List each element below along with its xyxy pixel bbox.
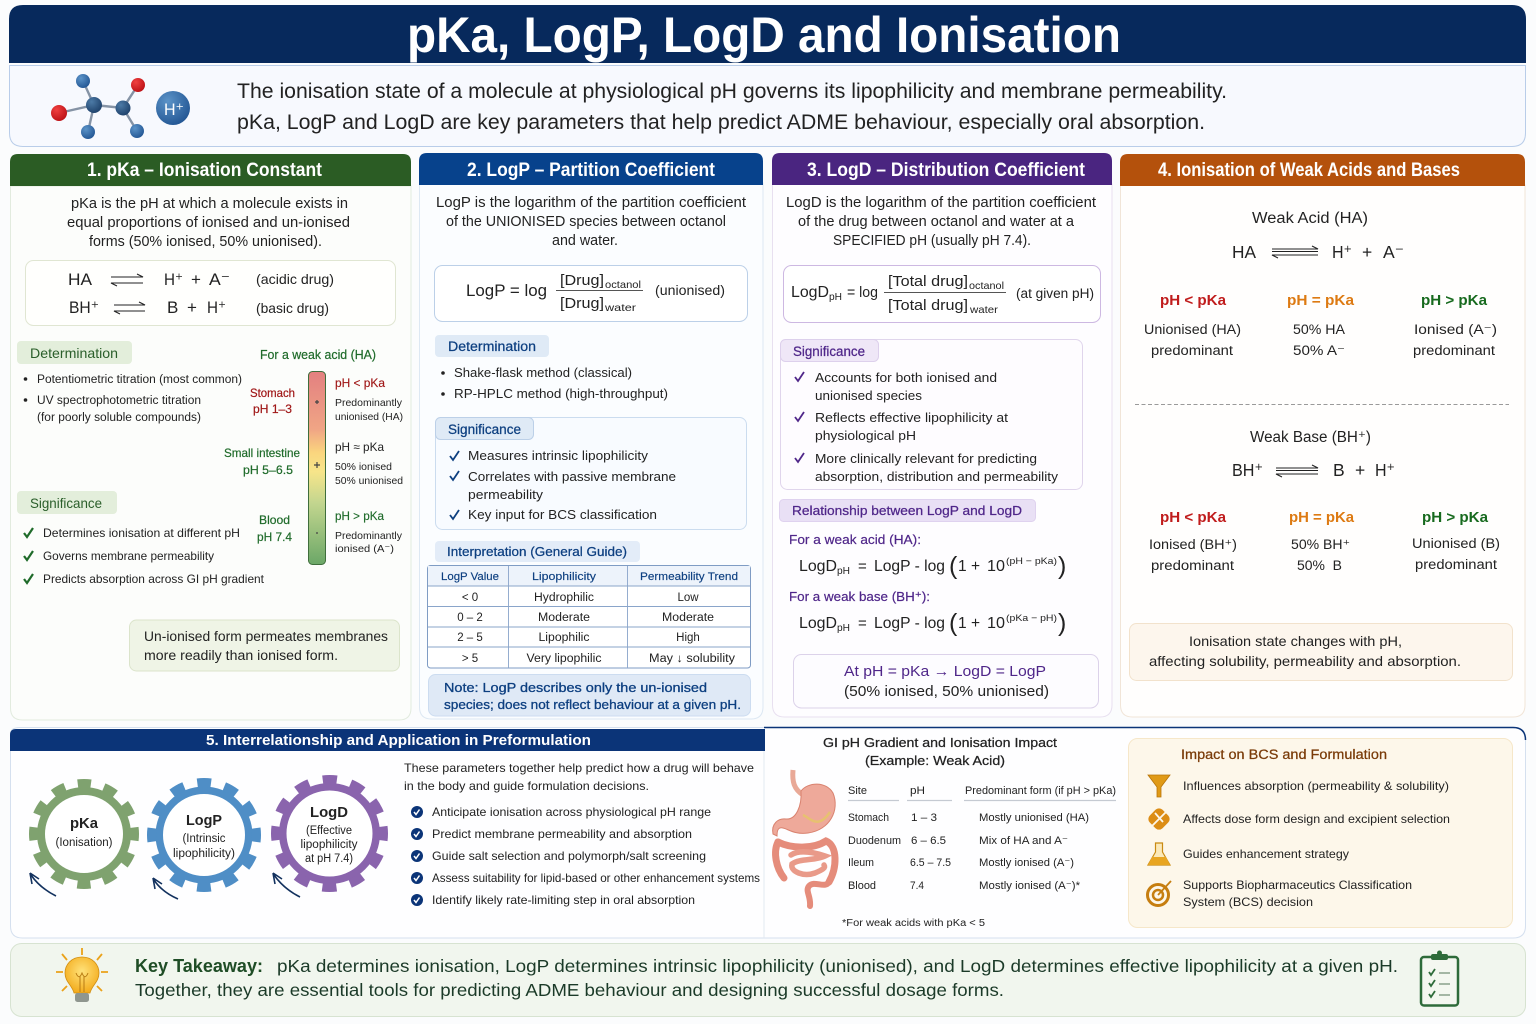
formula: weak base: 1 +: [958, 615, 980, 632]
table: LogP interpretation: Very lipophilic: [526, 653, 602, 665]
impact item: BCS: System (BCS) decision: [1183, 896, 1313, 909]
arrow: pKa gear: [30, 873, 56, 896]
chip: interpretation: [435, 541, 640, 562]
table: LogP interpretation: < 0: [462, 592, 478, 604]
chip: relationship: [780, 500, 1036, 522]
callout: un-ionised form: Un-ionised form permeates membranes: [144, 629, 388, 644]
weak acid block: Ionised (A⁻): [1414, 322, 1497, 337]
significance list: [24, 527, 265, 586]
callout: LogD equals LogP: [794, 654, 1098, 708]
intro text: pKa, LogP and LogD are key parameters that help predict ADME behaviour, especially oral absorption.: [237, 110, 1205, 134]
significance list: physiological pH: [815, 428, 916, 443]
weak base block: 50% BH⁺: [1291, 537, 1350, 552]
formula: weak acid: LogP - log: [874, 558, 945, 575]
pH scale heading: For a weak acid (HA): [260, 348, 376, 362]
determination list: UV spectrophotometric titration: [37, 395, 201, 407]
table: GI sites: 6 – 6.5: [911, 835, 946, 847]
equilibrium equations: +: [187, 298, 197, 317]
pH scale labels: 50% ionised: [335, 461, 392, 473]
arrow: LogD gear: [273, 873, 300, 897]
note: LogP: Note: LogP describes only the un-ionised: [444, 680, 707, 695]
table: LogP interpretation: Lipophilicity: [532, 571, 597, 583]
formula: weak base: LogP - log: [874, 615, 945, 632]
table: LogP interpretation: LogP Value: [441, 571, 499, 583]
callout: ionisation state: affecting solubility, permeability and absorption.: [1149, 654, 1461, 669]
weak base block: pH > pKa: [1422, 510, 1489, 526]
chip: interpretation: Interpretation (General Guide): [447, 544, 627, 559]
impact item: enhancement: Guides enhancement strategy: [1183, 848, 1349, 861]
table: LogP interpretation: 0 – 2: [457, 612, 483, 624]
impact item: BCS: [1183, 879, 1412, 909]
table: GI sites: Mostly unionised (HA): [979, 812, 1089, 824]
determination list: Shake-flask method (classical): [454, 365, 632, 380]
weak base block: pH = pKa: [1289, 510, 1355, 526]
weak acid block: 50% HA: [1293, 322, 1345, 337]
significance list: Measures intrinsic lipophilicity: [468, 448, 649, 463]
table: GI sites: Predominant form (if pH > pKa): [965, 785, 1116, 797]
pH scale labels: [335, 376, 403, 555]
intro text: [237, 79, 1227, 134]
callout: un-ionised form: more readily than ionised form.: [144, 648, 338, 663]
panel: LogD: [772, 153, 1112, 717]
table: LogP interpretation: Low: [677, 592, 699, 604]
weak acid block: HA: [1232, 242, 1256, 262]
equilibrium equations: (acidic drug): [256, 271, 334, 287]
significance list: Reflects effective lipophilicity at: [815, 410, 1008, 425]
table: LogP interpretation: > 5: [462, 653, 478, 665]
pKa definition: equal proportions of ionised and un-ionised: [67, 215, 350, 231]
icon: target: [1148, 881, 1171, 906]
pH scale labels: Predominantly: [335, 530, 403, 542]
LogD equation: [Total drug]: [888, 273, 968, 290]
formula: weak base: (pKa − pH): [1006, 613, 1057, 624]
icon: proton: H⁺: [164, 100, 184, 119]
determination list: [441, 365, 668, 401]
pKa definition: [67, 196, 350, 250]
impact item: dose form: Affects dose form design and excipient selection: [1183, 813, 1450, 826]
significance list: absorption, distribution and permeability: [815, 469, 1059, 484]
weak base block: [1149, 429, 1500, 573]
weak acid block: A⁻: [1383, 242, 1404, 262]
callout: LogD equals LogP: (50% ionised, 50% unionised): [844, 683, 1049, 700]
intro text: The ionisation state of a molecule at physiological pH governs its lipophilicity and membrane permeability.: [237, 79, 1227, 103]
weak acid block: pH = pKa: [1287, 293, 1355, 309]
table: GI sites: Mostly ionised (A⁻)*: [979, 880, 1081, 892]
callout: ionisation state: [1130, 624, 1512, 680]
significance box: [780, 340, 1082, 490]
table: GI sites: Mostly ionised (A⁻): [979, 857, 1074, 869]
formula: weak acid: LogD: [799, 558, 837, 575]
GI sites: [224, 386, 300, 544]
table: LogP interpretation: 2 – 5: [457, 632, 483, 644]
pH scale labels: ionised (A⁻): [335, 543, 394, 555]
formula: weak base: 10: [987, 615, 1005, 632]
formula: weak base: =: [858, 615, 867, 632]
table: LogP interpretation: Moderate: [662, 612, 714, 624]
heading: pKa: [10, 154, 411, 186]
LogD equation: pH: [829, 292, 842, 303]
weak base block: pH < pKa: [1160, 510, 1227, 526]
heading: section 5: 5. Interrelationship and Application in Preformulation: [206, 733, 591, 749]
note: LogP: species; does not reflect behaviour at a given pH.: [444, 697, 741, 712]
formula: weak acid: 10: [987, 558, 1005, 575]
significance box: [436, 418, 746, 530]
significance list: Predicts absorption across GI pH gradient: [43, 573, 265, 586]
table: GI sites: Blood: [848, 880, 876, 892]
GI sites: pH 5–6.5: [243, 463, 293, 477]
significance list: Governs membrane permeability: [43, 550, 214, 563]
takeaway text: pKa determines ionisation, LogP determines intrinsic lipophilicity (unionised), and LogD determines effective lipophilicity at a given pH.: [277, 956, 1398, 976]
formula: weak base: [789, 589, 1066, 637]
weak acid block: predominant: [1151, 343, 1233, 358]
heading: ionisation: 4. Ionisation of Weak Acids and Bases: [1158, 160, 1460, 181]
heading: LogP: [419, 153, 763, 185]
impact heading: Impact on BCS and Formulation: [1181, 747, 1387, 762]
GI heading: GI pH Gradient and Ionisation Impact: [823, 735, 1057, 750]
icon: proton: [156, 91, 190, 125]
footnote: *For weak acids with pKa < 5: [842, 918, 985, 929]
pH gradient bar: [308, 372, 326, 564]
arrow: LogP gear: [153, 878, 178, 899]
panel: weak acids and bases: [1120, 154, 1525, 717]
equilibrium equations: BH⁺: [69, 298, 99, 317]
formula: weak base: LogD: [799, 615, 837, 632]
heading: ionisation: [1120, 154, 1525, 186]
LogD definition: SPECIFIED pH (usually pH 7.4).: [833, 233, 1031, 249]
chip: significance: [780, 340, 878, 362]
title: pKa, LogP, LogD and Ionisation: [407, 7, 1121, 63]
equilibrium equations: B: [167, 298, 178, 317]
determination list: [24, 374, 242, 424]
application intro: in the body and guide formulation decisions.: [404, 780, 649, 793]
callout: un-ionised form: [130, 620, 400, 671]
weak acid block: [1144, 210, 1497, 358]
LogP equation: octanol: [605, 279, 641, 291]
formula: weak acid: [789, 532, 1066, 580]
pH scale labels: pH > pKa: [335, 509, 384, 523]
weak acid block: Weak Acid (HA): [1252, 210, 1368, 227]
table: LogP interpretation: Hydrophilic: [534, 592, 594, 604]
weak base block: Weak Base (BH⁺): [1250, 429, 1371, 446]
formula: weak base: ): [1058, 609, 1066, 637]
GI sites: pH 7.4: [257, 530, 292, 544]
table: GI sites: Ileum: [848, 857, 874, 869]
formula: weak base: pH: [837, 623, 850, 634]
LogP equation: water: [604, 302, 637, 314]
formula: weak acid: (pH − pKa): [1006, 556, 1057, 567]
weak acid block: 50% A⁻: [1293, 343, 1345, 358]
icon: digestive tract: [773, 770, 835, 906]
icon: molecule: [51, 74, 145, 139]
LogP definition: of the UNIONISED species between octanol: [446, 214, 726, 230]
equilibrium equations: H⁺: [164, 270, 183, 289]
equilibrium equations: [26, 260, 396, 326]
gear: LogD: at pH 7.4): [305, 853, 353, 865]
icon: clipboard: [1421, 950, 1458, 1006]
weak acid block: pH > pKa: [1421, 293, 1488, 309]
LogP definition: LogP is the logarithm of the partition coefficient: [436, 195, 746, 211]
LogP definition: [436, 195, 746, 249]
weak base block: B: [1333, 460, 1345, 480]
weak base block: BH⁺: [1232, 460, 1263, 480]
GI heading: (Example: Weak Acid): [865, 753, 1005, 768]
chip: significance: [436, 418, 534, 440]
application list: Assess suitability for lipid-based or other enhancement systems: [432, 872, 760, 885]
formula: weak acid: 1 +: [958, 558, 980, 575]
LogP equation: LogP = log: [466, 282, 547, 300]
table: LogP interpretation: Lipophilic: [538, 632, 590, 644]
weak acid block: Unionised (HA): [1144, 322, 1241, 337]
icon: light bulb: [56, 948, 108, 1002]
icon: tablets: [1146, 806, 1172, 832]
panel: impact on BCS: [1128, 738, 1512, 928]
equilibrium equations: H⁺: [207, 298, 226, 317]
pH scale labels: pH < pKa: [335, 376, 385, 390]
GI sites: Stomach: [250, 386, 295, 400]
determination list: RP-HPLC method (high-throughput): [454, 386, 668, 401]
pH scale labels: Predominantly: [335, 397, 403, 409]
impact item: absorption: Influences absorption (permeability & solubility): [1183, 780, 1449, 793]
weak base block: predominant: [1415, 557, 1497, 572]
GI sites: pH 1–3: [253, 402, 292, 416]
formula: weak acid: pH: [837, 566, 850, 577]
LogP definition: and water.: [552, 233, 618, 249]
table: LogP interpretation: Moderate: [538, 612, 590, 624]
gear: pKa: pKa: [70, 815, 99, 832]
LogD equation: [784, 266, 1100, 322]
significance list: Determines ionisation at different pH: [43, 527, 240, 540]
callout: ionisation state: Ionisation state changes with pH,: [1189, 634, 1402, 649]
gear: pKa: [27, 777, 141, 891]
table: LogP interpretation: [428, 566, 750, 668]
formula: weak base: (: [949, 609, 958, 637]
formula: weak acid: For a weak acid (HA):: [789, 532, 921, 547]
LogD equation: water: [969, 304, 999, 316]
table: GI sites: Duodenum: [848, 835, 901, 847]
icon: flask: [1148, 843, 1170, 865]
LogP equation: [Drug]: [560, 295, 604, 312]
application list: Anticipate ionisation across physiological pH range: [432, 806, 711, 819]
chip: relationship: Relationship between LogP and LogD: [792, 503, 1022, 518]
application list: Identify likely rate-limiting step in oral absorption: [432, 894, 695, 907]
LogD definition: of the drug between octanol and water at a: [798, 214, 1074, 230]
weak base block: predominant: [1151, 558, 1234, 573]
LogD equation: [Total drug]: [888, 297, 968, 314]
panel: interrelationship and application: [10, 728, 1526, 938]
gear: LogD: LogD: [310, 804, 348, 821]
formula: weak acid: (: [949, 552, 958, 580]
intro panel: [10, 66, 1526, 146]
note: LogP: [428, 674, 750, 716]
equilibrium equations: HA: [68, 270, 93, 289]
equilibrium equations: +: [191, 270, 201, 289]
weak base block: +: [1355, 460, 1365, 480]
application list: [411, 806, 760, 907]
table: GI sites: Site: [848, 785, 867, 797]
table: LogP interpretation: May ↓ solubility: [649, 653, 735, 665]
significance list: permeability: [468, 487, 544, 502]
table: GI sites: Mix of HA and A⁻: [979, 835, 1068, 847]
table: GI sites: 7.4: [910, 880, 924, 892]
application list: Predict membrane permeability and absorption: [432, 828, 692, 841]
LogP equation: (unionised): [655, 282, 725, 298]
takeaway text: Key Takeaway:: [135, 956, 263, 976]
weak acid block: pH < pKa: [1160, 293, 1227, 309]
weak acid block: predominant: [1413, 343, 1495, 358]
significance list: More clinically relevant for predicting: [815, 451, 1037, 466]
table: GI sites: 6.5 – 7.5: [910, 857, 951, 869]
application intro: [404, 762, 754, 793]
LogD equation: = log: [847, 284, 878, 301]
weak acid block: H⁺: [1332, 242, 1352, 262]
weak base block: H⁺: [1375, 460, 1395, 480]
table: GI sites: pH: [910, 785, 925, 797]
weak acid block: +: [1362, 242, 1372, 262]
application intro: These parameters together help predict how a drug will behave: [404, 762, 754, 775]
GI sites: Blood: [259, 513, 290, 527]
callout: LogD equals LogP: At pH = pKa → LogD = LogP: [844, 663, 1046, 680]
determination list: (for poorly soluble compounds): [37, 412, 201, 424]
pH scale labels: pH ≈ pKa: [335, 440, 384, 454]
LogD definition: [786, 195, 1096, 249]
LogD equation: (at given pH): [1016, 286, 1094, 301]
panel: pKa: [10, 154, 411, 720]
formula: weak base: For a weak base (BH⁺):: [789, 589, 930, 604]
GI sites: Small intestine: [224, 446, 300, 460]
formula: weak acid: =: [858, 558, 867, 575]
equilibrium equations: A⁻: [209, 270, 230, 289]
LogD equation: LogD: [791, 284, 829, 301]
LogP equation: [434, 266, 748, 322]
pH scale labels: 50% unionised: [335, 475, 403, 487]
significance list: Correlates with passive membrane: [468, 469, 676, 484]
equilibrium equations: (basic drug): [256, 300, 329, 316]
chip: significance: [17, 491, 117, 514]
pKa definition: pKa is the pH at which a molecule exists in: [71, 196, 348, 212]
gear: pKa: (Ionisation): [56, 837, 113, 849]
heading: section 5: [10, 729, 765, 751]
takeaway text: [135, 956, 1398, 1000]
significance list: [450, 448, 676, 522]
heading: LogD: [772, 153, 1112, 185]
formula: weak acid: ): [1058, 552, 1066, 580]
chip: determination: Determination: [448, 339, 536, 354]
heading: pKa: 1. pKa – Ionisation Constant: [87, 160, 323, 181]
gear: LogP: [145, 776, 263, 894]
table: GI sites: Stomach: [848, 812, 889, 824]
table: LogP interpretation: Permeability Trend: [640, 571, 738, 583]
significance list: [795, 370, 1059, 484]
chip: significance: Significance: [793, 344, 865, 359]
chip: determination: [435, 335, 549, 357]
table: GI sites: [848, 785, 1116, 892]
title banner: [9, 5, 1526, 63]
pH scale labels: unionised (HA): [335, 411, 403, 423]
chip: significance: Significance: [448, 422, 521, 437]
gear: LogD: (Effective: [306, 825, 352, 837]
LogD definition: LogD is the logarithm of the partition coefficient: [786, 195, 1096, 211]
pKa definition: forms (50% ionised, 50% unionised).: [89, 234, 322, 250]
table: GI sites: 1 – 3: [911, 812, 937, 824]
panel: key takeaway: [10, 944, 1526, 1016]
gear: LogP: lipophilicity): [173, 848, 235, 860]
panel: LogP: [419, 153, 763, 719]
takeaway text: Together, they are essential tools for predicting ADME behaviour and designing successful dosage forms.: [135, 980, 1004, 1000]
LogP equation: [Drug]: [560, 272, 604, 289]
GI heading: [823, 735, 1057, 768]
impact item: BCS: Supports Biopharmaceutics Classification: [1183, 879, 1412, 892]
table: LogP interpretation: High: [676, 632, 700, 644]
gear: LogD: [269, 773, 390, 894]
determination list: Potentiometric titration (most common): [37, 374, 242, 386]
significance list: Key input for BCS classification: [468, 507, 657, 522]
icon: funnel: [1148, 775, 1170, 797]
gear: LogD: lipophilicity: [300, 839, 358, 851]
weak base block: Unionised (B): [1412, 536, 1500, 551]
application list: Guide salt selection and polymorph/salt screening: [432, 850, 706, 863]
LogD equation: octanol: [969, 280, 1004, 292]
chip: significance: Significance: [30, 495, 102, 511]
heading: LogP: 2. LogP – Partition Coefficient: [467, 160, 716, 181]
chip: determination: [17, 341, 132, 364]
weak base block: Ionised (BH⁺): [1149, 537, 1237, 552]
heading: LogD: 3. LogD – Distribution Coefficient: [807, 160, 1086, 181]
significance list: Accounts for both ionised and: [815, 370, 997, 385]
gear: LogP: LogP: [186, 812, 222, 829]
chip: determination: Determination: [30, 345, 118, 361]
gear: LogP: (Intrinsic: [182, 833, 226, 845]
weak base block: 50% B: [1297, 558, 1342, 573]
significance list: unionised species: [815, 388, 923, 403]
